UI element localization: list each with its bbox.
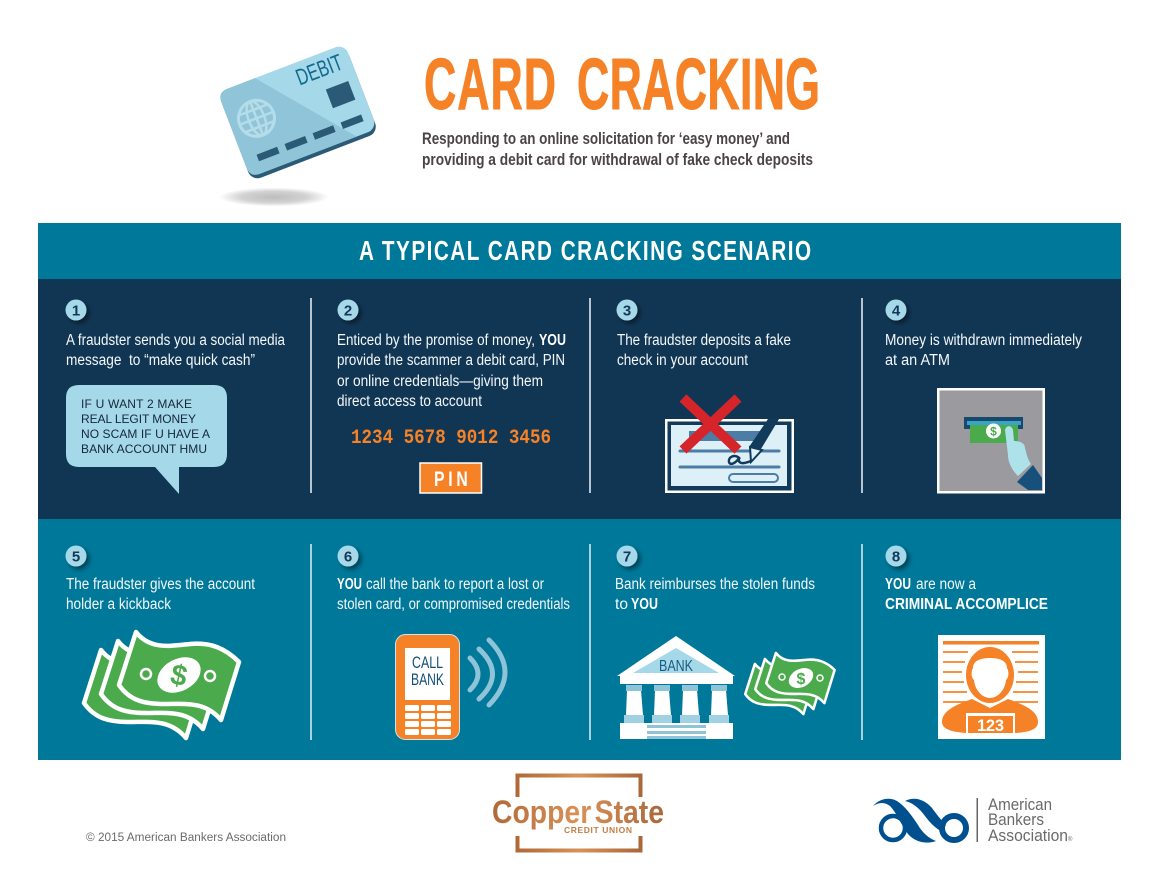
subtitle: providing a debit card for withdrawal of fake check deposits — [422, 151, 813, 169]
subtitle — [422, 130, 813, 169]
icon: stack of cash — [84, 632, 239, 738]
step 2: YOU — [539, 332, 566, 349]
speech bubble: REAL LEGIT MONEY — [81, 412, 196, 426]
step 1: message to “make quick cash” — [66, 352, 255, 369]
logo: Copper State Credit Union — [490, 776, 668, 850]
icon: stack of cash: $ — [168, 659, 190, 693]
icon: debit card: DEBIT — [292, 49, 346, 90]
title — [424, 44, 820, 125]
icon: small cash stack — [745, 653, 835, 714]
step 6: call the bank to report a lost or — [366, 576, 544, 593]
icon: phone calling bank: CALL — [412, 653, 443, 672]
step 4: 4 — [892, 302, 901, 320]
logo: American Bankers Association: Bankers — [988, 810, 1044, 829]
step 3: The fraudster deposits a fake — [617, 332, 791, 349]
step 2: Enticed by the promise of money, — [337, 332, 535, 349]
step 6: YOU — [337, 576, 362, 593]
step 2: 2 — [344, 302, 352, 320]
step 2: or online credentials—giving them — [337, 373, 543, 390]
step 5: The fraudster gives the account — [66, 576, 256, 593]
logo: American Bankers Association: ® — [1068, 836, 1073, 843]
step 5: 5 — [72, 548, 80, 566]
step 7: 7 — [623, 548, 631, 566]
icon: mugshot — [938, 635, 1045, 739]
speech bubble: BANK ACCOUNT HMU — [81, 442, 207, 456]
copyright: © 2015 American Bankers Association — [86, 832, 286, 844]
step 2 — [337, 300, 566, 493]
panel: heading band: A TYPICAL CARD CRACKING SCENARIO — [359, 236, 811, 267]
step 1: 1 — [72, 302, 80, 320]
step 7 — [615, 546, 835, 739]
logo: Copper State Credit Union: Copper State — [492, 794, 664, 830]
step 4 — [885, 300, 1082, 494]
icon: fake check — [665, 398, 794, 493]
step 7: to — [615, 596, 628, 613]
icon: mugshot: 123 — [977, 717, 1004, 735]
step 3: 3 — [623, 302, 631, 320]
logo: American Bankers Association: American — [988, 795, 1052, 814]
step 7: Bank reimburses the stolen funds — [615, 576, 815, 593]
icon: debit card — [218, 44, 379, 206]
panel: top row steps — [38, 279, 1121, 520]
icon: small cash stack: $ — [797, 671, 806, 688]
step 6: stolen card, or compromised credentials — [337, 596, 570, 613]
speech bubble — [66, 385, 227, 494]
icon: phone calling bank — [396, 634, 505, 740]
step 2: direct access to account — [337, 393, 483, 410]
icon: phone calling bank: BANK — [411, 670, 444, 689]
step 5: holder a kickback — [66, 596, 171, 613]
card number: 1234 5678 9012 3456 — [351, 427, 551, 450]
step 8: are now a — [916, 576, 976, 593]
icon: ATM withdrawal: $ — [990, 424, 997, 438]
logo: American Bankers Association: Association — [988, 826, 1068, 845]
speech bubble: NO SCAM IF U HAVE A — [81, 427, 210, 441]
step 8 — [885, 546, 1048, 739]
step 6: 6 — [344, 548, 352, 566]
step 4: at an ATM — [885, 352, 950, 369]
logo: American Bankers Association — [873, 795, 1073, 845]
step 1 — [66, 300, 285, 494]
icon: bank building: BANK — [659, 658, 693, 675]
step 3 — [616, 300, 794, 493]
step 2: provide the scammer a debit card, PIN — [337, 352, 565, 369]
PIN box: PIN — [434, 467, 468, 491]
step 8: 8 — [892, 548, 900, 566]
step 7: YOU — [631, 596, 658, 613]
PIN box — [420, 463, 482, 493]
speech bubble: IF U WANT 2 MAKE — [81, 397, 192, 411]
step 3: check in your account — [617, 352, 749, 369]
title: CRACKING — [577, 44, 820, 125]
panel: bottom row steps — [38, 519, 1121, 760]
icon: ATM withdrawal — [937, 388, 1045, 494]
step 4: Money is withdrawn immediately — [885, 332, 1082, 349]
step 5 — [66, 546, 256, 738]
logo: Copper State Credit Union: CREDIT UNION — [564, 825, 632, 835]
step 6 — [337, 546, 570, 740]
step 8: CRIMINAL ACCOMPLICE — [885, 596, 1048, 613]
icon: bank building — [617, 636, 735, 739]
panel: heading band — [38, 223, 1121, 279]
subtitle: Responding to an online solicitation for ‘easy money’ and — [422, 130, 790, 148]
title: CARD — [424, 44, 556, 125]
step 1: A fraudster sends you a social media — [66, 332, 285, 349]
step 8: YOU — [885, 576, 911, 593]
